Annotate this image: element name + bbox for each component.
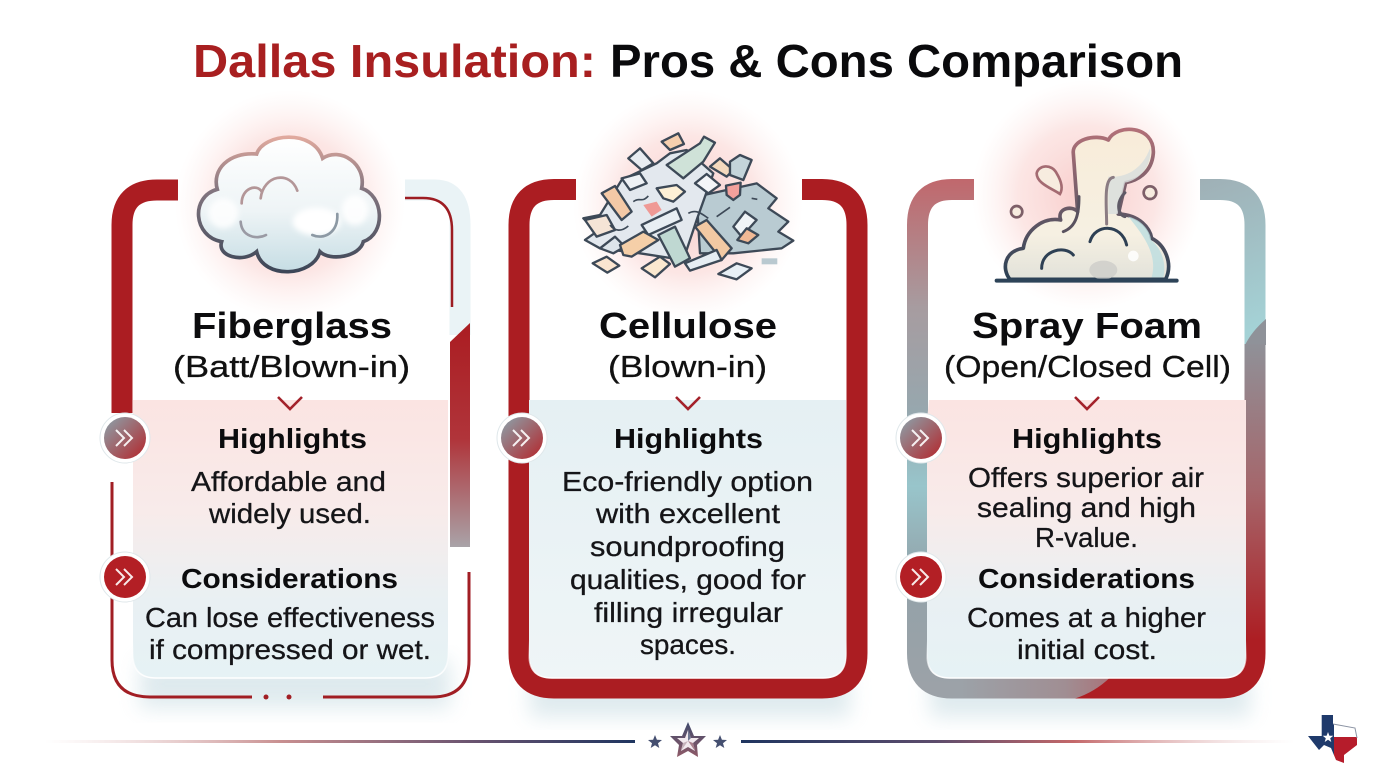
frame: fiberglass [112,190,470,700]
chevron: cellulose [676,397,700,409]
subheading: spray foam: (Open/Closed Cell) [944,349,1231,384]
text: spray foam highlights: sealing and high [977,492,1196,523]
badge: fiberglass highlights [100,413,150,463]
text: spray foam considerations [967,563,1206,665]
icon: texas flag map [1308,715,1358,763]
text: cellulose highlights: with excellent [595,498,780,529]
footer divider [45,722,1295,757]
text: spray foam considerations: Comes at a higher [967,602,1206,633]
text: spray foam highlights: Highlights [1012,423,1162,454]
text: fiberglass considerations: Considerations [181,563,398,594]
icon: spray foam [997,129,1177,281]
frame: spray foam [918,190,1266,698]
text: cellulose highlights [562,423,813,660]
heading: spray foam: Spray Foam [972,305,1202,346]
subheading: cellulose: (Blown-in) [608,349,767,384]
badge: fiberglass considerations [100,552,150,602]
icon: small star right [713,735,727,748]
icon: small star left [648,735,662,748]
text: fiberglass highlights: Highlights [218,423,367,454]
title [193,35,1183,87]
text: fiberglass highlights: Affordable and [191,466,386,497]
badge: spray foam considerations [896,552,946,602]
text: fiberglass considerations: if compressed or wet. [149,634,431,665]
heading: fiberglass: Fiberglass [192,305,392,346]
text: cellulose highlights: soundproofing [590,531,785,562]
subheading: fiberglass: (Batt/Blown-in) [173,349,410,384]
panel: fiberglass [100,90,470,708]
text: spray foam highlights: R-value. [1035,522,1138,553]
heading: cellulose: Cellulose [599,305,777,346]
text: fiberglass considerations [145,563,435,665]
icon: large star [670,722,706,757]
inner panel: cellulose [529,400,846,678]
text: spray foam considerations: Considerations [978,563,1195,594]
icon: cloud glow [175,90,405,320]
text: spray foam considerations: initial cost. [1017,634,1157,665]
icon: fiberglass cloud [199,137,379,272]
text: fiberglass highlights: widely used. [208,498,371,529]
badge: spray foam highlights [896,413,946,463]
title: Pros & Cons Comparison [610,35,1183,87]
icon: cellulose glow [573,90,803,320]
panel: cellulose [497,90,857,717]
inner panel: fiberglass [133,400,448,678]
text: cellulose highlights: qualities, good for [570,564,806,595]
panel: spray foam [896,80,1266,717]
text: spray foam highlights: Offers superior air [968,462,1204,493]
icon: foam glow [972,80,1202,310]
text: spray foam highlights [968,423,1204,553]
badge: cellulose highlights [497,413,547,463]
text: cellulose highlights: Eco-friendly option [562,466,813,497]
text: cellulose highlights: filling irregular [594,597,783,628]
text: cellulose highlights: Highlights [614,423,763,454]
inner panel: spray foam [927,400,1246,678]
icon: cellulose paper pile [583,133,793,279]
text: fiberglass highlights [191,423,386,529]
title: Dallas Insulation: [193,35,596,87]
text: fiberglass considerations: Can lose effectiveness [145,602,435,633]
chevron: spray foam [1075,397,1099,409]
chevron: fiberglass [278,397,302,409]
text: cellulose highlights: spaces. [640,629,736,660]
frame: cellulose [519,190,857,688]
